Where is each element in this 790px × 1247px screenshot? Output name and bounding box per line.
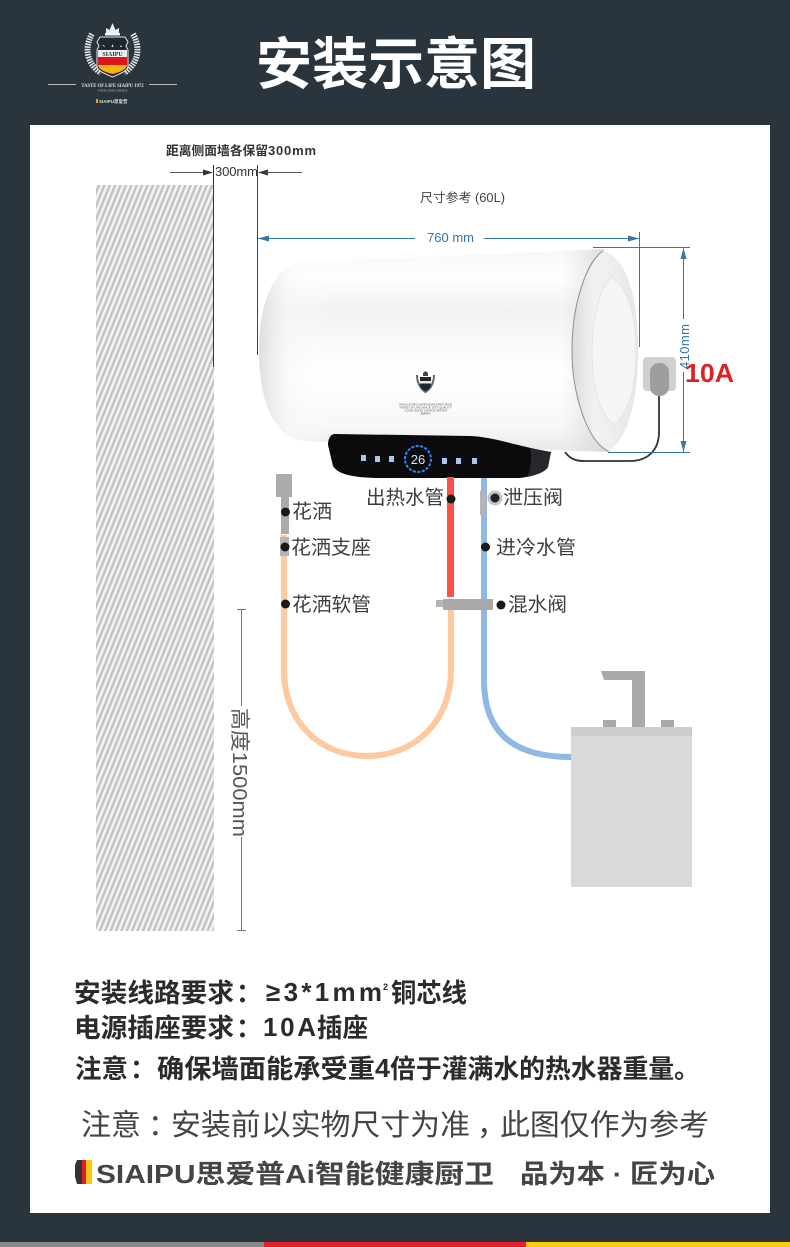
300mm clearance dimension: 300mm	[215, 164, 258, 179]
size reference caption: 尺寸参考 (60L)	[420, 190, 505, 205]
cold water pipe	[484, 478, 571, 757]
footer brand line	[75, 1159, 715, 1189]
crest tagline: SIAIPU思爱普	[99, 98, 128, 105]
requirement: socket: 电源插座要求	[74, 1013, 234, 1043]
note: wall load: 注意	[75, 1054, 128, 1084]
requirement: wiring: 2	[383, 982, 388, 992]
crest crown	[105, 23, 120, 36]
note: wall load	[75, 1053, 700, 1084]
control panel: 26	[411, 452, 425, 467]
title: 安装示意图	[256, 33, 536, 96]
size disclaimer: ，	[477, 1109, 507, 1142]
brand crest logo	[48, 23, 177, 105]
shower head	[276, 474, 292, 534]
callout labels: 花洒软管	[292, 594, 371, 616]
panel touch keys	[361, 455, 477, 464]
size disclaimer: 安装前以实物尺寸为准	[171, 1109, 470, 1142]
crest tagline	[48, 84, 177, 105]
requirement: wiring: ≥3*1mm	[266, 977, 382, 1007]
shower holder	[280, 537, 289, 556]
size disclaimer: 注意	[81, 1109, 141, 1142]
shower hose	[284, 535, 451, 756]
760 mm width dimension	[258, 230, 640, 347]
heater small print: TASTE OF LIFE SINCE 1972 QUALITY	[399, 406, 452, 410]
power plug	[565, 357, 676, 461]
760 mm width dimension: 760 mm	[427, 230, 474, 245]
callout labels: 进冷水管	[496, 537, 576, 559]
requirement: socket	[74, 1012, 368, 1043]
cabinet	[571, 727, 692, 887]
faucet handles	[603, 720, 616, 728]
note: wall load: 4	[375, 1053, 391, 1083]
size disclaimer: ：	[148, 1109, 178, 1142]
requirement: wiring	[74, 977, 467, 1008]
crest shield: SIAIPU	[102, 52, 123, 58]
side clearance heading: 300mm	[268, 143, 316, 158]
crest tagline: TASTE OF LIFE SIAIPU 1972	[81, 84, 144, 89]
size disclaimer	[81, 1109, 709, 1142]
heater end cap	[572, 251, 638, 451]
side clearance heading: 距离侧面墙各保留	[166, 143, 268, 158]
faucet and cabinet	[571, 671, 692, 887]
callout labels: 花洒支座	[291, 537, 371, 559]
callout labels: 出热水管	[366, 487, 444, 509]
bottom colour stripe	[0, 1242, 790, 1247]
requirement: wiring: 铜芯线	[391, 978, 467, 1008]
water heater	[259, 249, 638, 478]
note: wall load: 确保墙面能承受重	[157, 1054, 375, 1084]
callout labels: 花洒	[292, 501, 332, 523]
heater small print	[399, 402, 453, 416]
10A label: 10A	[685, 358, 734, 388]
heater crest badge	[417, 371, 434, 392]
hot water pipe	[447, 477, 454, 597]
pressure relief valve	[480, 490, 502, 515]
size disclaimer: 此图仅作为参考	[500, 1109, 709, 1142]
mixing valve	[436, 599, 493, 610]
1500mm height dimension: 高度1500mm	[228, 708, 251, 837]
crest tagline: YOUR GOOD CHOICE	[98, 88, 128, 92]
installation requirements	[74, 977, 700, 1084]
callout labels: 混水阀	[508, 594, 567, 616]
note: wall load: 倍于灌满水的热水器重量。	[390, 1054, 700, 1084]
note: wall load: ：	[130, 1054, 156, 1084]
wall edge line	[213, 165, 214, 367]
hatched wall	[96, 185, 214, 931]
side clearance heading	[166, 143, 316, 158]
heater small print: SIAIPU	[421, 412, 430, 416]
300mm clearance dimension	[170, 164, 302, 355]
control panel	[328, 434, 551, 478]
crest laurel wings	[88, 34, 137, 73]
footer slogan: SIAIPU思爱普Ai智能健康厨卫	[96, 1159, 494, 1189]
410mm height dimension	[593, 247, 692, 453]
footer logo mark	[75, 1160, 92, 1184]
callout dots	[280, 494, 506, 610]
callout labels: 泄压阀	[503, 487, 563, 509]
requirement: socket: 10A	[263, 1012, 316, 1042]
requirement: wiring: ：	[236, 978, 262, 1008]
callout labels	[291, 487, 576, 616]
footer brand line: 品为本 · 匠为心	[520, 1159, 715, 1189]
faucet	[601, 671, 645, 727]
heater small print: YOUR GOOD CHOICE WATER	[404, 408, 448, 412]
heater body	[259, 249, 610, 452]
panel temperature display	[405, 446, 431, 472]
heater small print: SIAIPU ELECTRICAL WATER HEATER EXPERT BRAND	[399, 402, 453, 406]
requirement: socket: ：	[236, 1013, 262, 1043]
410mm height dimension: 410mm	[677, 324, 692, 369]
requirement: socket: 插座	[317, 1013, 368, 1043]
requirement: wiring: 安装线路要求	[74, 978, 234, 1008]
